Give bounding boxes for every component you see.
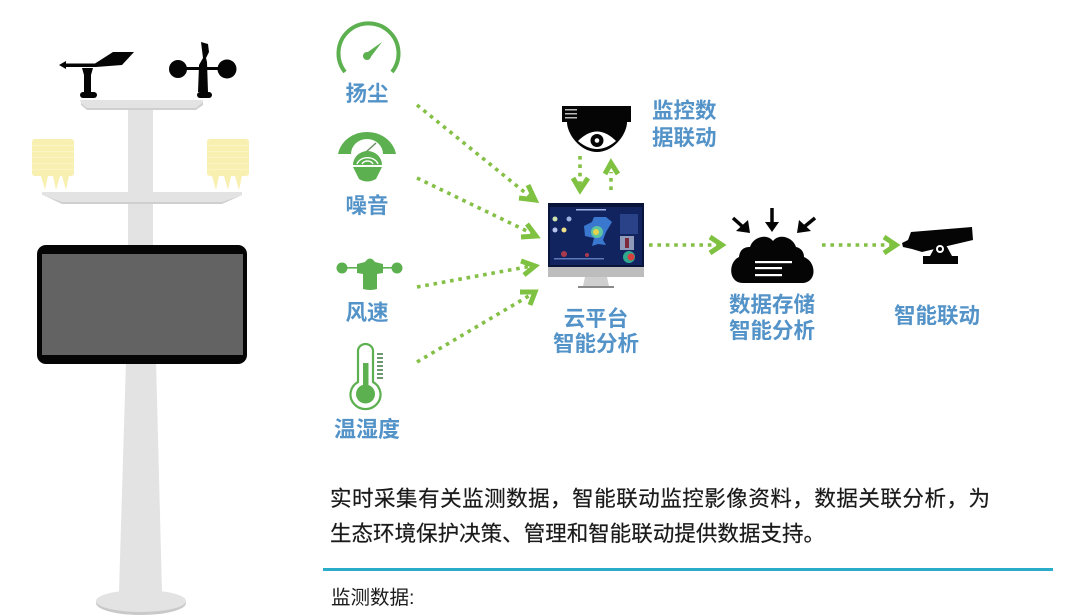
sensor left	[32, 139, 74, 190]
label: data storage: 数据存储	[729, 293, 815, 317]
wind vane	[59, 52, 134, 98]
icon: cannon	[902, 227, 973, 264]
label: cloud platform: 云平台	[564, 306, 628, 331]
label: camera linkage: 监控数	[652, 99, 717, 123]
weather pole	[32, 42, 249, 615]
label: camera linkage	[652, 99, 717, 150]
label: camera linkage: 据联动	[652, 126, 717, 150]
arrow: camera up	[605, 163, 618, 190]
pole upper	[128, 100, 153, 250]
lower crossbar	[42, 192, 242, 204]
icon: dust gauge	[339, 23, 399, 72]
icon: cloud storage	[731, 208, 815, 283]
label: data storage: 智能分析	[729, 319, 815, 343]
icon: noise meter	[338, 132, 396, 182]
arrow: camera down	[573, 156, 588, 190]
icon: wind speed	[336, 258, 402, 290]
top crossbar	[80, 100, 203, 110]
label: smart linkage: 智能联动	[894, 304, 980, 328]
arrow: dust to cloud	[417, 105, 535, 200]
pole lower	[119, 360, 162, 592]
label: data storage	[729, 293, 815, 343]
icon: thermometer	[351, 344, 383, 409]
label: wind speed: 风速	[345, 301, 389, 325]
arrow: temperature to cloud	[417, 292, 535, 362]
arrow: noise to cloud	[417, 178, 536, 237]
section heading: 监测数据:	[331, 587, 414, 609]
display screen	[37, 245, 247, 364]
sensor right	[207, 139, 249, 190]
description text	[330, 487, 990, 546]
section rule	[323, 568, 1053, 571]
anemometer	[169, 42, 236, 98]
icon: surveillance camera	[562, 106, 631, 152]
label: temperature and humidity: 温湿度	[334, 417, 400, 442]
label: noise: 噪音	[345, 193, 389, 218]
arrow: platform to storage	[649, 237, 722, 253]
arrow: wind to cloud	[417, 261, 535, 287]
label: dust: 扬尘	[345, 82, 389, 106]
description text: 生态环境保护决策、管理和智能联动提供数据支持。	[330, 522, 825, 546]
label: cloud platform: 智能分析	[553, 332, 639, 356]
arrow: storage to cannon	[822, 237, 896, 253]
description text: 实时采集有关监测数据，智能联动监控影像资料，数据关联分析，为	[330, 487, 990, 511]
pole base	[96, 590, 186, 615]
label: cloud platform	[553, 306, 639, 356]
icon: monitor dashboard	[548, 203, 644, 288]
